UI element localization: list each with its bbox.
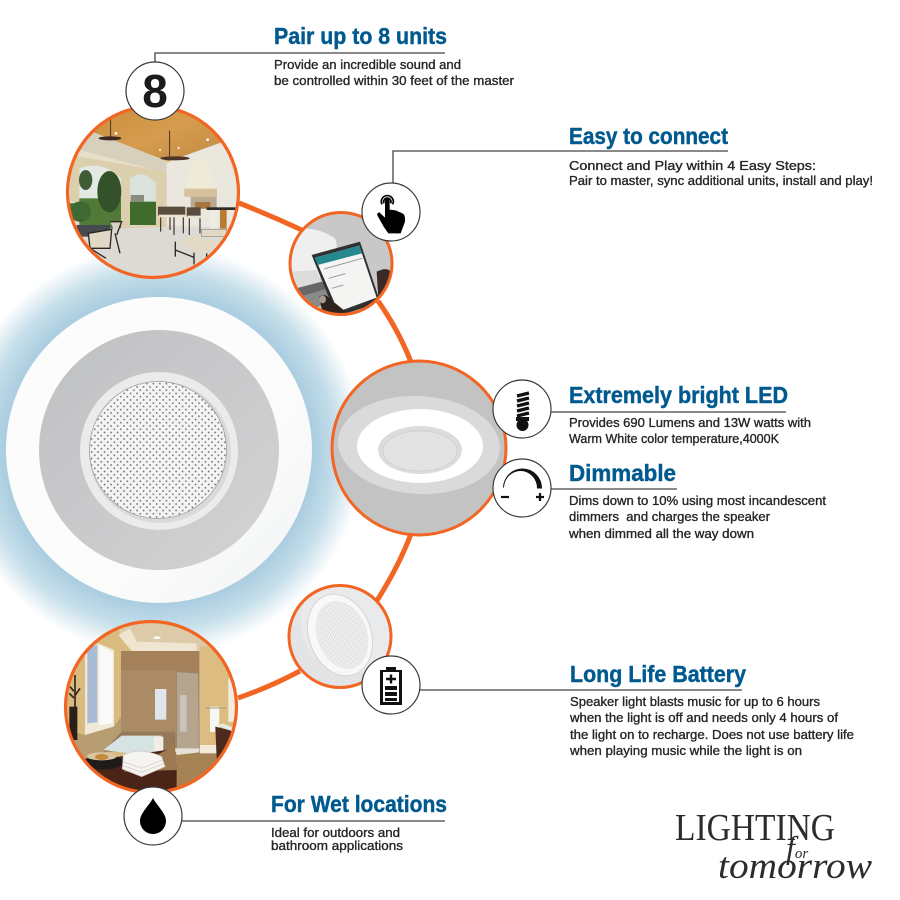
photo: bathroom <box>65 621 238 795</box>
leader line: long life battery <box>420 689 742 691</box>
icon: number 8 <box>126 62 184 120</box>
photo: ceiling fixture closeup <box>332 361 506 535</box>
text: dimmable description: Dims down to 10% using most incandescent <box>569 493 826 508</box>
towels <box>122 751 165 777</box>
icon: water drop <box>124 787 182 845</box>
window <box>85 643 114 735</box>
leader line: dimmable <box>551 488 677 490</box>
text: connect description <box>569 158 873 188</box>
text: dimmable description: when dimmed all the way down <box>568 526 754 541</box>
stools <box>161 215 200 235</box>
text: connect description: Pair to master, sync additional units, install and play! <box>569 173 873 188</box>
text: LED description <box>569 415 811 446</box>
logo: Lighting for Tomorrow <box>675 807 872 887</box>
photo: speaker closeup <box>288 584 392 689</box>
photo: covered patio <box>67 106 240 280</box>
hand <box>319 295 346 313</box>
logo: Lighting for Tomorrow: for <box>786 829 808 865</box>
heading: easy to connect: Easy to connect <box>569 123 728 149</box>
phone <box>312 242 379 317</box>
counter <box>94 738 177 790</box>
icon: dimmer arc <box>493 459 551 517</box>
text: LED description: Warm White color temperature,4000K <box>569 431 779 446</box>
orange connector arcs <box>238 203 411 698</box>
text: battery description <box>569 694 854 758</box>
heading: extremely bright LED: Extremely bright LED <box>569 382 788 408</box>
wood ceiling <box>92 107 223 162</box>
text: wet locations description: Ideal for outdoors and <box>271 825 400 840</box>
hood <box>185 160 216 189</box>
photo: phone with control app <box>290 212 393 318</box>
heading: for wet locations: For Wet locations <box>271 791 447 817</box>
logo: Lighting for Tomorrow: LIGHTING <box>675 807 835 849</box>
leader line: pair up to 8 units <box>155 53 445 62</box>
icon: number 8: 8 <box>142 65 168 117</box>
text: battery description: when the light is off and needs only 4 hours of <box>569 710 838 725</box>
text: battery description: Speaker light blasts music for up to 6 hours <box>570 694 820 709</box>
icon: battery <box>362 656 420 714</box>
text: LED description: Provides 690 Lumens and 13W watts with <box>569 415 811 430</box>
text: pair description: Provide an incredible sound and <box>274 57 461 72</box>
arches <box>79 166 121 202</box>
text: battery description: when playing music while the light is on <box>569 743 802 758</box>
tub <box>103 732 175 752</box>
text: battery description: the light on to recharge. Does not use battery life <box>570 727 854 742</box>
icon: spiral bulb <box>493 380 551 438</box>
main product: speaker light <box>6 297 312 603</box>
vanity <box>215 726 232 758</box>
heading: pair up to 8 units: Pair up to 8 units <box>274 23 447 49</box>
blue glow behind the light <box>0 245 364 655</box>
furniture <box>69 203 89 219</box>
leader line: wet locations <box>182 820 445 822</box>
heading: long life battery: Long Life Battery <box>570 661 746 687</box>
text: wet locations description: bathroom applications <box>271 838 404 853</box>
floor <box>175 750 218 787</box>
text: connect description: Connect and Play within 4 Easy Steps: <box>569 158 816 173</box>
icon: touch hand <box>362 183 420 241</box>
towel <box>210 707 219 732</box>
text: dimmable description <box>568 493 826 541</box>
text: pair description <box>274 57 515 88</box>
text: dimmable description: dimmers and charges the speaker <box>569 509 771 524</box>
heading: dimmable: Dimmable <box>569 460 676 486</box>
leader line: extremely bright LED <box>551 411 786 413</box>
fans <box>111 118 170 158</box>
text: pair description: be controlled within 30 feet of the master <box>274 73 515 88</box>
logo: Lighting for Tomorrow: tomorrow <box>718 846 872 887</box>
leader line: easy to connect <box>393 151 728 183</box>
text: wet locations description <box>271 825 404 853</box>
plant <box>69 675 80 708</box>
